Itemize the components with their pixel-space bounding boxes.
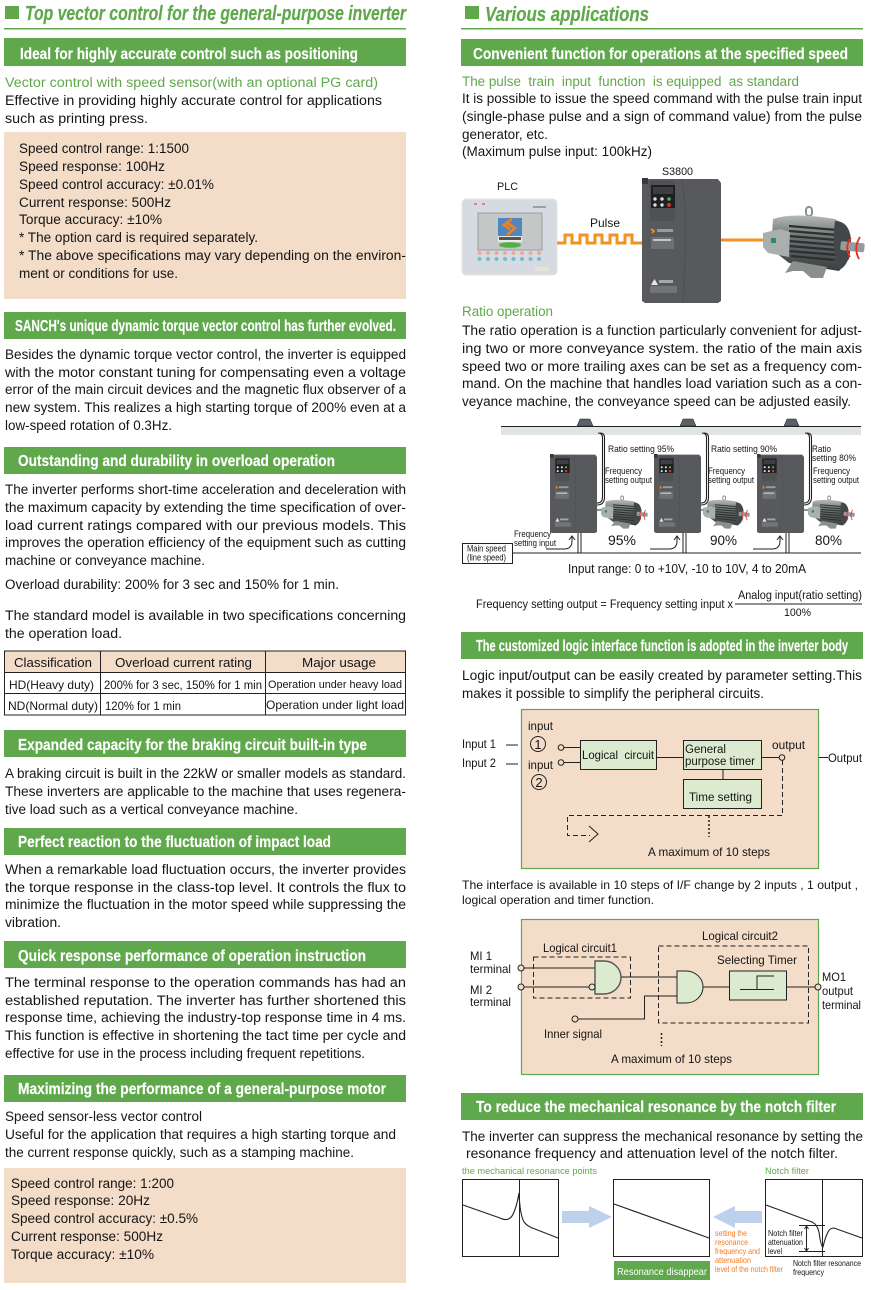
gate labels: output: [822, 984, 854, 998]
caption: setting the notch filter: level of the notch filter: [715, 1264, 783, 1274]
ratio labels: setting 80%: [812, 453, 856, 464]
diagram: pulse train connection: [462, 166, 865, 303]
inputs: input: [528, 758, 554, 772]
text block: pulse train input: (Maximum pulse input: 100kHz): [462, 144, 652, 159]
text block: pulse train input: generator, etc.: [462, 127, 548, 142]
label: resonance disappear: [614, 1261, 710, 1280]
panel: sensor-less specifications: Torque accuracy: ±10%: [11, 1247, 154, 1262]
banner: impact load: [4, 828, 406, 855]
logical circuit and timer blocks: Logical circuit: [582, 748, 655, 762]
panel: sensor-less specifications: Speed response: 20Hz: [11, 1193, 150, 1208]
logical circuit and timer blocks: Time setting: [689, 790, 752, 804]
text block: ratio operation: ing two or more conveyance system. the ratio of the main axis: [462, 341, 862, 356]
text block: overload operation: machine or conveyance machine.: [5, 553, 205, 568]
text block: quick response description: This function is effective in shortening the tact time per cycle and: [5, 1028, 406, 1043]
heading: top vector control: Top vector control for the general-purpose inverter: [25, 3, 407, 25]
text block: dynamic torque description: with the motor constant tuning for compensating even a voltage: [4, 365, 406, 380]
formula: frequency setting output: 100%: [784, 607, 811, 619]
banner: quick response: [4, 941, 406, 968]
text block: pulse train input: (single-phase pulse and a sign of command value) from the pulse: [462, 109, 862, 124]
gate labels: MO1: [822, 970, 846, 984]
text block: overload operation: The standard model is available in two specifications concerning: [5, 608, 406, 623]
chart: notch filter: attenuation: [768, 1237, 803, 1247]
heading: top vector control: [4, 3, 407, 30]
caption: setting the notch filter: frequency and: [715, 1246, 760, 1256]
table: duty classification: Major usage: [302, 655, 376, 670]
arrow: from notch chart: [713, 1206, 762, 1228]
text block: quick response description: response time, achieving the industry-top response time in 4 ms.: [5, 1010, 406, 1025]
selecting timer block: Selecting Timer: [717, 953, 797, 967]
wires: [524, 968, 815, 1019]
text block: overload operation: load current ratings compared with our previous models. This: [5, 518, 406, 533]
panel: sensor vector specifications: Torque accuracy: ±10%: [19, 212, 162, 227]
panel: sensor-less specifications: Speed control accuracy: ±0.5%: [11, 1211, 198, 1226]
steps caption: A maximum of 10 steps: [648, 845, 770, 859]
S3800 inverter: S3800: [662, 166, 693, 178]
text block: quick response description: effective for use in the process including frequent repetitions.: [5, 1046, 365, 1061]
gate labels: A maximum of 10 steps: [611, 1052, 732, 1066]
chart: notch filter: frequency: [793, 1267, 825, 1277]
logical circuit and timer blocks: output: [772, 738, 806, 752]
text block: sensor-less vector control: the current response quickly, such as a stamping machine.: [5, 1145, 354, 1160]
banner: dynamic torque vector control: [4, 312, 406, 339]
text block: impact load description: vibration.: [5, 915, 61, 930]
banner: quick response: Quick response performance of operation instruction: [18, 948, 366, 965]
text block: pulse train input: [462, 74, 862, 159]
chart: resonance disappears: [614, 1180, 710, 1256]
text block: ratio operation: speed two or more trailing axes can be set as a frequency com-: [462, 359, 862, 374]
logical circuit and timer blocks: [558, 738, 806, 808]
ratio percentages: 80%: [815, 532, 842, 548]
text block: pulse train input: The pulse train input function is equipped as standard: [462, 74, 799, 89]
text block: quick response description: The terminal response to the operation commands has had an: [5, 975, 406, 990]
text block: dynamic torque description: [4, 347, 406, 433]
text block: ratio operation: mand. On the machine that handles load variation such as a con-: [462, 376, 862, 391]
diagram: ratio operation line: [462, 419, 861, 576]
banner: ideal for highly accurate control: [4, 38, 406, 66]
text block: dynamic torque description: error of the main circuit devices and the magnetic flux observer of a: [5, 382, 406, 397]
text block: notch filter description: The inverter can suppress the mechanical resonance by setting the: [462, 1129, 863, 1144]
gate labels: [470, 929, 861, 1066]
logical circuit and timer blocks: purpose timer: [685, 756, 755, 768]
text block: ratio operation: Ratio operation: [462, 304, 553, 319]
text block: vector control with speed sensor: Effective in providing highly accurate control for applications: [5, 93, 382, 108]
heading: various applications: [461, 4, 863, 30]
text block: quick response description: established reputation. The inverter has further shortened this: [5, 993, 406, 1008]
chart: notch filter: [765, 1166, 862, 1277]
text block: overload operation: the operation load.: [5, 626, 122, 641]
text block: ratio operation: [462, 304, 862, 409]
terminals: [518, 965, 821, 1022]
text block: logic input and output: [462, 668, 862, 701]
text block: overload operation: Overload durability: 200% for 3 sec and 150% for 1 min.: [5, 577, 339, 592]
text block: ratio operation: veyance machine, the conveyance speed can be adjusted easily.: [462, 394, 851, 409]
pulse label and square wave: [557, 216, 642, 243]
chart: notch filter: level: [768, 1246, 782, 1256]
text block: sensor-less vector control: Useful for the application that requires a high starting torque and: [5, 1127, 396, 1142]
arrow: to result chart: [562, 1206, 612, 1228]
panel: sensor vector specifications: * The option card is required separately.: [19, 230, 258, 245]
text block: impact load description: [5, 862, 406, 930]
chart: mechanical resonance points: the mechanical resonance points: [462, 1166, 597, 1177]
ratio percentages: 90%: [710, 532, 737, 548]
ratio labels: setting output: [708, 475, 754, 486]
table: duty classification: ND(Normal duty): [8, 699, 98, 713]
text block: dynamic torque description: new system. This realizes a high starting torque of 200% even at a: [5, 400, 406, 415]
text block: pulse train input: It is possible to issue the speed command with the pulse train input: [462, 91, 862, 106]
banner: dynamic torque vector control: SANCH's unique dynamic torque vector control has further evolved.: [15, 318, 396, 335]
S3800 inverter: [642, 166, 721, 303]
caption: setting the notch filter: resonance: [715, 1237, 748, 1247]
panel: sensor vector specifications: Speed control accuracy: ±0.01%: [19, 177, 214, 192]
ratio labels: Ratio: [812, 444, 831, 455]
text block: vector control with speed sensor: such as printing press.: [5, 111, 148, 126]
ratio labels: setting output: [605, 475, 652, 486]
ratio labels: setting output: [813, 475, 859, 486]
banner: ideal for highly accurate control: Ideal for highly accurate control such as positioning: [20, 46, 358, 63]
text block: dynamic torque description: Besides the dynamic torque vector control, the inverter is equipped: [5, 347, 406, 362]
gate labels: Logical circuit2: [702, 929, 778, 943]
gates: [589, 961, 703, 1003]
text block: sensor-less vector control: [5, 1109, 396, 1160]
steps dotted line: [660, 1033, 662, 1046]
table: duty classification: Operation under light load: [266, 698, 404, 712]
table: duty classification: 120% for 1 min: [105, 701, 181, 713]
banner: general-purpose motor: Maximizing the performance of a general-purpose motor: [18, 1081, 386, 1098]
text block: quick response description: [5, 975, 406, 1061]
ratio percentages: 95%: [608, 532, 636, 548]
text block: impact load description: the torque response in the class-top level. It controls the flux to: [5, 880, 406, 895]
gate labels: terminal: [470, 995, 511, 1009]
chart: mechanical resonance points: [462, 1166, 597, 1256]
inputs: 1: [534, 737, 542, 752]
ratio labels: Frequency: [813, 466, 850, 477]
input range note: Input range: 0 to +10V, -10 to 10V, 4 to 20mA: [568, 562, 807, 576]
text block: logic input and output: makes it possible to simplify the peripheral circuits.: [462, 686, 764, 701]
heading: various applications: Various applications: [485, 4, 649, 26]
banner: specified speed: [461, 39, 863, 66]
banner: braking circuit: [4, 730, 406, 757]
banner: customized logic interface: [461, 632, 863, 659]
gate labels: Inner signal: [544, 1027, 602, 1041]
text block: sensor-less vector control: Speed sensor-less vector control: [5, 1109, 202, 1124]
text block: overload operation: The inverter performs short-time acceleration and deceleration with: [5, 482, 406, 497]
text block: dynamic torque description: low-speed rotation of 0.3Hz.: [5, 418, 172, 433]
inputs: [462, 719, 554, 790]
banner: impact load: Perfect reaction to the fluctuation of impact load: [18, 834, 331, 851]
text block: impact load description: When a remarkable load fluctuation occurs, the inverter provides: [5, 862, 406, 877]
panel: sensor vector specifications: * The above specifications may vary depending on the environ-: [19, 248, 406, 263]
inputs: Input 1: [462, 737, 496, 751]
panel: sensor-less specifications: Current response: 500Hz: [11, 1229, 163, 1244]
logical circuit and timer blocks: General: [685, 744, 726, 756]
table: duty classification: Classification: [14, 655, 92, 670]
conveyor belt: [501, 419, 861, 435]
banner: general-purpose motor: [4, 1075, 406, 1102]
text block: overload operation: [5, 482, 406, 641]
PLC controller: PLC: [497, 181, 518, 193]
ratio percentages: [608, 532, 842, 548]
text block: ratio operation: The ratio operation is a function particularly convenient for adjust-: [462, 323, 862, 338]
ratio labels: [514, 444, 859, 549]
chart: notch filter: Notch filter: [765, 1166, 809, 1177]
inputs: input: [528, 719, 554, 733]
text block: notch filter description: [462, 1129, 863, 1161]
formula: frequency setting output: Analog input(ratio setting): [738, 590, 862, 602]
banner: overload durability: [4, 447, 406, 474]
ratio labels: setting input: [514, 538, 556, 549]
panel: sensor vector specifications: ment or conditions for use.: [19, 266, 178, 281]
text block: notch filter description: resonance frequency and attenuation level of the notch filter.: [466, 1146, 838, 1161]
table: duty classification: [4, 651, 406, 715]
text block: logic input and output: Logic input/output can be easily created by parameter setting.This: [462, 668, 862, 683]
inputs: 2: [535, 775, 543, 790]
panel: sensor-less specifications: Speed control range: 1:200: [11, 1176, 174, 1191]
text block: interface steps: [462, 878, 858, 907]
panel: sensor vector specifications: [4, 132, 406, 299]
PLC controller: [462, 181, 557, 275]
diagram: logic gates: [470, 920, 861, 1074]
gate labels: terminal: [470, 962, 511, 976]
caption: setting the notch filter: attenuation: [715, 1255, 751, 1265]
formula: frequency setting output: [476, 590, 862, 619]
text block: overload operation: the maximum capacity by extending the time specification of over-: [5, 500, 406, 515]
ratio labels: Frequency: [605, 466, 642, 477]
selecting timer block: [717, 953, 797, 1000]
main speed box: [462, 544, 512, 564]
text block: braking circuit description: [5, 766, 406, 817]
dashed logic boxes: [534, 946, 808, 1023]
ratio signal lines: [597, 433, 812, 510]
table: duty classification: Overload current rating: [115, 655, 252, 670]
table: duty classification: HD(Heavy duty): [9, 678, 94, 692]
table: duty classification: 200% for 3 sec, 150% for 1 min: [104, 680, 262, 692]
caption: setting the notch filter: [715, 1228, 783, 1274]
feedback loop arrow: [568, 760, 782, 842]
text block: vector control with speed sensor: Vector control with speed sensor(with an optional PG card): [5, 75, 378, 90]
panel: sensor vector specifications: Speed control range: 1:1500: [19, 141, 189, 156]
pulse label and square wave: Pulse: [590, 216, 620, 230]
panel: sensor-less specifications: [4, 1168, 406, 1283]
text block: impact load description: minimize the fluctuation in the motor speed while suppressing the: [5, 897, 406, 912]
panel: sensor vector specifications: Speed response: 100Hz: [19, 159, 165, 174]
banner: overload durability: Outstanding and durability in overload operation: [18, 453, 335, 470]
banner: notch filter: [461, 1093, 863, 1120]
panel: sensor vector specifications: Current response: 500Hz: [19, 195, 171, 210]
main speed box: (line speed): [467, 552, 506, 564]
gate labels: MI 2: [470, 983, 492, 997]
chart: notch filter: Notch filter: [768, 1228, 803, 1238]
diagram: logic timer block: [462, 710, 863, 868]
text block: interface steps: logical operation and timer function.: [462, 893, 654, 907]
table: duty classification: Operation under heavy load: [268, 679, 402, 691]
inputs: Input 2: [462, 756, 496, 770]
ratio labels: Ratio setting 90%: [711, 444, 777, 455]
ratio labels: Ratio setting 95%: [608, 444, 674, 455]
text block: braking circuit description: These inverters are applicable to the machine that uses regenera-: [5, 784, 406, 799]
motors: [601, 496, 855, 529]
main speed line and arrows: [513, 533, 861, 553]
formula: frequency setting output: Frequency setting output = Frequency setting input x: [476, 599, 733, 611]
output line and motor: [721, 207, 865, 278]
text block: braking circuit description: tive load such as a vertical conveyance machine.: [5, 802, 298, 817]
text block: vector control with speed sensor: [5, 75, 382, 126]
text block: overload operation: improves the operation efficiency of the equipment such as cutting: [5, 535, 406, 550]
inverters: [550, 454, 804, 533]
text block: braking circuit description: A braking circuit is built in the 22kW or smaller models as standard.: [5, 766, 406, 781]
caption: setting the notch filter: setting the: [715, 1228, 747, 1238]
ratio labels: Frequency: [708, 466, 745, 477]
gate labels: Logical circuit1: [543, 941, 617, 955]
label: resonance disappear: Resonance disappear: [617, 1266, 707, 1278]
gate labels: MI 1: [470, 949, 492, 963]
text block: interface steps: The interface is available in 10 steps of I/F change by 2 inputs , 1 output ,: [462, 878, 858, 892]
ratio labels: Frequency: [514, 529, 551, 540]
gate labels: terminal: [822, 998, 861, 1012]
banner: braking circuit: Expanded capacity for the braking circuit built-in type: [18, 737, 367, 754]
output label: Output: [828, 751, 863, 765]
main speed box: Main speed: [467, 544, 506, 554]
